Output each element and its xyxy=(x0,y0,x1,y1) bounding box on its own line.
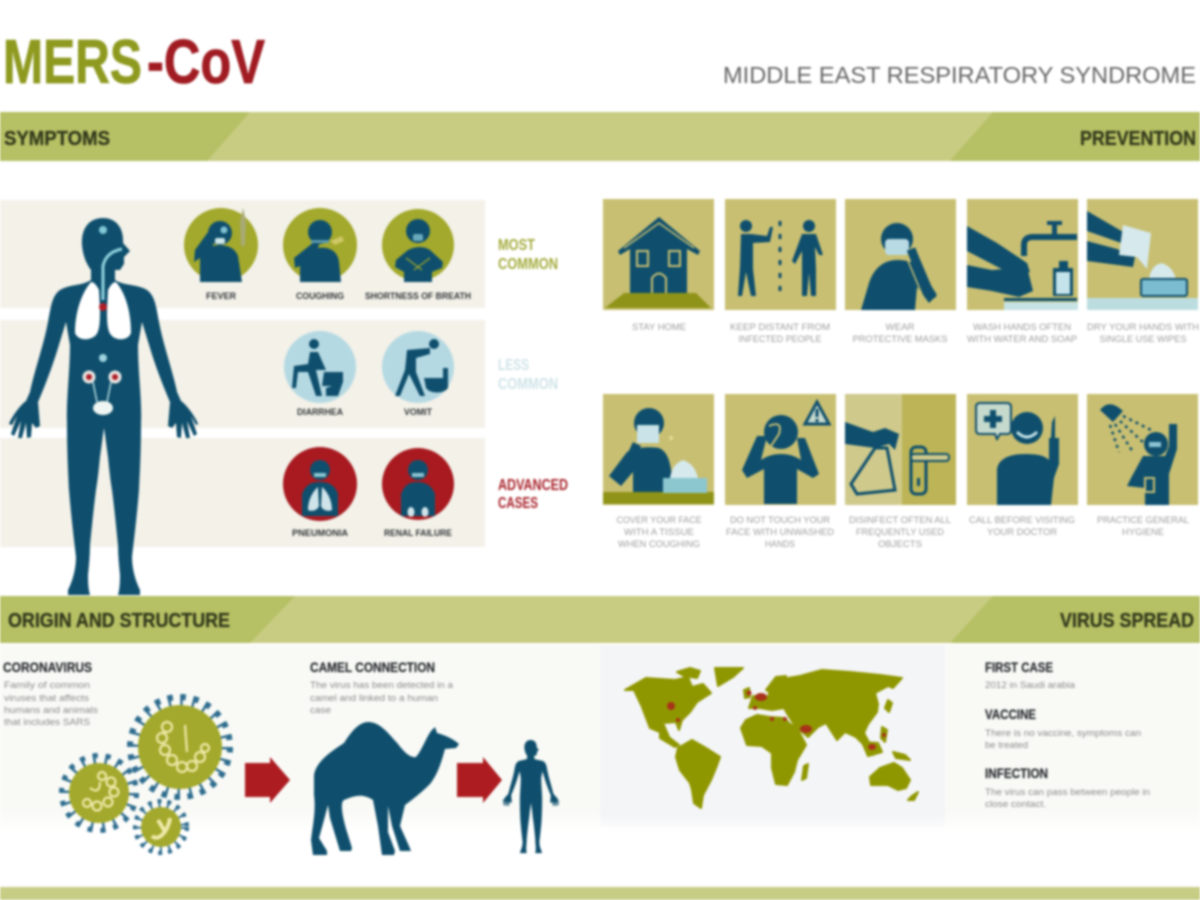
outbreak hotspots xyxy=(667,690,886,750)
arctic islands xyxy=(677,668,700,678)
icon: pneumonia xyxy=(283,447,357,521)
symptom labels: VOMIT xyxy=(404,407,432,417)
icon: human figure xyxy=(502,740,559,853)
lungs xyxy=(75,282,131,339)
sore throat spot xyxy=(99,303,107,311)
first case xyxy=(985,660,1075,690)
severity label: most common: COMMON xyxy=(498,256,558,273)
arrow: virus to camel xyxy=(245,757,290,803)
panel: coronavirus: viruses that affects xyxy=(4,693,90,703)
panel: camel connection: The virus has been detected in a xyxy=(310,680,453,690)
prevention captions: CALL BEFORE VISITING xyxy=(969,515,1075,525)
warning triangle xyxy=(805,402,829,424)
prevention captions: DRY YOUR HANDS WITH xyxy=(1087,322,1199,332)
symptom labels: SHORTNESS OF BREATH xyxy=(365,291,471,301)
panel: camel connection xyxy=(310,660,459,855)
severity label: less common: COMMON xyxy=(498,376,558,393)
icon: coughing xyxy=(283,208,357,282)
first case: FIRST CASE xyxy=(985,660,1053,675)
japan xyxy=(885,700,892,712)
title: MERS xyxy=(3,28,142,97)
panel: world map xyxy=(600,645,945,827)
subtitle: MIDDLE EAST RESPIRATORY SYNDROME xyxy=(723,62,1196,88)
icon: fever xyxy=(184,208,258,282)
north america xyxy=(625,677,711,737)
symptom labels: FEVER xyxy=(206,291,236,301)
vaccine: be treated xyxy=(985,740,1028,750)
eurasia xyxy=(749,670,902,755)
panel: coronavirus: Family of common xyxy=(4,680,90,690)
symptom labels: DIARRHEA xyxy=(297,407,343,417)
lower section band: origin and virus spread: ORIGIN AND STRUCTURE xyxy=(8,610,230,632)
panel: camel connection: camel and linked to a human xyxy=(310,693,438,703)
panel: symptoms xyxy=(0,200,568,595)
panel: coronavirus: CORONAVIRUS xyxy=(3,660,92,675)
panel: lower section background xyxy=(0,645,1200,832)
icon: virus medium xyxy=(62,756,136,830)
greenland xyxy=(715,668,743,686)
tile: do not touch face xyxy=(725,394,836,505)
lower section band: origin and virus spread xyxy=(0,596,1200,643)
kidneys xyxy=(82,370,122,402)
severity label: most common: MOST xyxy=(498,237,535,254)
prevention captions: WASH HANDS OFTEN xyxy=(973,322,1071,332)
prevention captions: YOUR DOCTOR xyxy=(987,527,1058,537)
panel: camel connection: case xyxy=(310,705,331,715)
scandinavia xyxy=(766,676,786,694)
prevention captions: PRACTICE GENERAL xyxy=(1097,515,1189,525)
footer band xyxy=(0,887,1200,900)
panel: coronavirus xyxy=(3,660,230,853)
infection xyxy=(985,766,1150,809)
icon: camel xyxy=(311,722,459,855)
severity label: less common xyxy=(498,357,558,393)
arrow: camel to human xyxy=(457,757,502,803)
prevention captions xyxy=(616,322,1199,549)
header band: symptoms and prevention: SYMPTOMS xyxy=(4,128,110,150)
africa xyxy=(741,715,806,785)
icon: virus large xyxy=(130,697,230,797)
symptom labels xyxy=(206,291,471,538)
severity label: advanced cases: ADVANCED xyxy=(498,477,568,494)
vaccine xyxy=(985,707,1141,750)
prevention captions: DO NOT TOUCH YOUR xyxy=(730,515,831,525)
tile: dry hands xyxy=(1087,199,1198,310)
britain xyxy=(744,688,750,698)
panel: prevention xyxy=(603,199,1199,549)
panel: virus spread facts xyxy=(985,660,1150,809)
prevention captions: STAY HOME xyxy=(632,322,686,332)
airway xyxy=(103,249,122,300)
severity label: less common: LESS xyxy=(498,357,529,374)
indonesia xyxy=(862,742,882,756)
icon: vomit xyxy=(382,331,454,403)
new guinea xyxy=(893,752,910,760)
symptom labels: COUGHING xyxy=(296,291,344,301)
tile: call doctor xyxy=(967,394,1078,505)
severity label: advanced cases: CASES xyxy=(498,495,538,512)
prevention captions: DISINFECT OFTEN ALL xyxy=(849,515,951,525)
header band: symptoms and prevention xyxy=(0,112,1200,161)
prevention captions: HYGIENE xyxy=(1122,527,1164,537)
tile: cover your face xyxy=(603,394,714,505)
panel: camel connection: CAMEL CONNECTION xyxy=(310,660,435,675)
prevention captions: HANDS xyxy=(765,539,795,549)
icon: renal failure xyxy=(382,448,454,520)
south america xyxy=(676,740,720,808)
infection: close contact. xyxy=(985,799,1046,809)
tile: wear masks xyxy=(845,199,956,310)
prevention captions: WITH A TISSUE xyxy=(624,527,694,537)
prevention captions: INFECTED PEOPLE xyxy=(738,334,822,344)
panel: coronavirus: that includes SARS xyxy=(4,717,90,727)
australia xyxy=(870,763,910,790)
tile: keep distant xyxy=(725,199,836,310)
infection: The virus can pass between people in xyxy=(985,787,1150,797)
prevention captions: FREQUENTLY USED xyxy=(856,527,945,537)
tile: disinfect objects xyxy=(845,394,956,505)
speech bubble with cross xyxy=(976,403,1011,439)
symptom labels: PNEUMONIA xyxy=(292,528,348,538)
first case: 2012 in Saudi arabia xyxy=(985,680,1075,690)
panel: coronavirus: humans and animals xyxy=(4,705,99,715)
bladder xyxy=(93,401,113,415)
prevention captions: SINGLE USE WIPES xyxy=(1100,334,1186,344)
infection: INFECTION xyxy=(985,766,1048,781)
icon: shortness of breath xyxy=(382,209,454,282)
symptom labels: RENAL FAILURE xyxy=(384,528,452,538)
icon: diarrhea xyxy=(284,331,356,403)
prevention captions: COVER YOUR FACE xyxy=(616,515,702,525)
prevention captions: WEAR xyxy=(886,322,915,332)
prevention captions: WHEN COUGHING xyxy=(618,539,700,549)
severity label: most common xyxy=(498,237,558,273)
tile: wash hands xyxy=(967,199,1078,310)
stomach spot xyxy=(99,354,107,362)
prevention captions: KEEP DISTANT FROM xyxy=(730,322,830,332)
new zealand xyxy=(908,792,918,800)
prevention captions: FACE WITH UNWASHED xyxy=(726,527,835,537)
tile: practice hygiene xyxy=(1087,394,1198,505)
philippines xyxy=(881,727,887,742)
tile: stay home xyxy=(603,199,714,310)
title: -CoV xyxy=(147,28,265,97)
prevention captions: WITH WATER AND SOAP xyxy=(967,334,1077,344)
icon: human body with organs xyxy=(9,218,198,595)
icon: virus small xyxy=(135,801,187,853)
vaccine: There is no vaccine, symptoms can xyxy=(985,728,1141,738)
prevention captions: PROTECTIVE MASKS xyxy=(852,334,948,344)
vaccine: VACCINE xyxy=(985,707,1036,722)
severity label: advanced cases xyxy=(498,477,568,512)
prevention captions: OBJECTS xyxy=(878,539,922,549)
head spot xyxy=(99,226,107,234)
title xyxy=(3,28,265,97)
central america xyxy=(660,733,679,747)
madagascar xyxy=(802,764,808,780)
